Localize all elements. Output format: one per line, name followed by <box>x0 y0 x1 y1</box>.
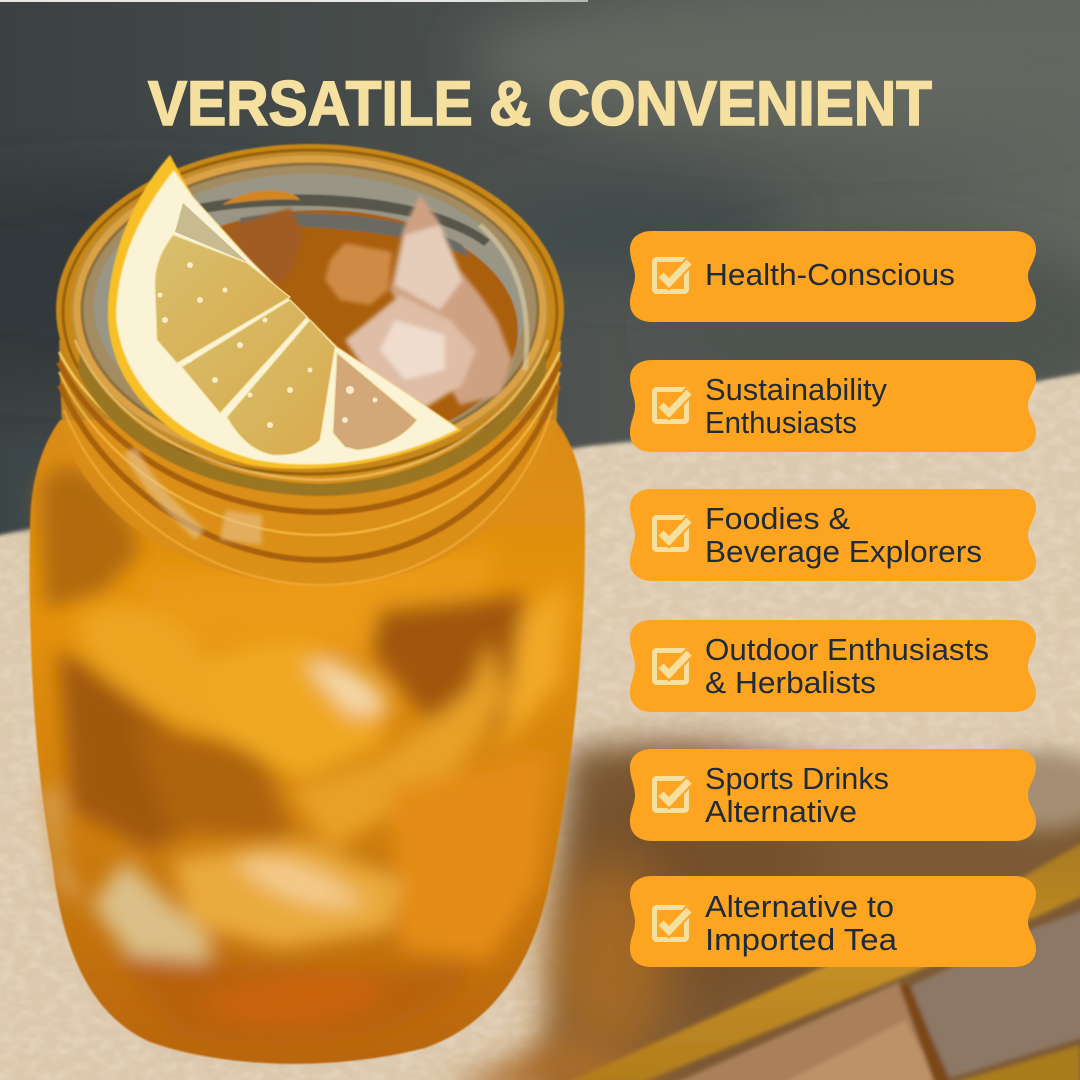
lemon wedge <box>108 155 462 469</box>
photo: mason jar of iced tea <box>30 144 585 1064</box>
lemon pulp highlights <box>158 262 378 428</box>
tag: Health-Conscious: Health-Conscious <box>705 257 955 292</box>
wooden board and sticks <box>568 841 1080 1080</box>
lemon segments <box>155 235 417 455</box>
title: VERSATILE & CONVENIENT <box>148 69 932 139</box>
tag: Health-Conscious <box>630 231 1036 322</box>
tag: Foodies & Beverage Explorers: Foodies & <box>705 501 850 536</box>
list panel: audience tags <box>630 231 1036 967</box>
ice cubes <box>224 195 512 408</box>
tag: Outdoor Enthusiasts & Herbalists: Outdoor Enthusiasts <box>705 632 989 667</box>
table shadow behind jar <box>540 745 1080 1080</box>
tag: Foodies & Beverage Explorers <box>630 489 1036 581</box>
jar rim and mouth <box>56 144 564 496</box>
tag: Sports Drinks Alternative: Sports Drinks <box>705 761 889 796</box>
tag: Alternative to Imported Tea: Alternative to <box>705 889 894 924</box>
tag: Sports Drinks Alternative: Alternative <box>705 794 857 829</box>
tag: Outdoor Enthusiasts & Herbalists <box>630 620 1036 712</box>
tag: Sports Drinks Alternative <box>630 749 1036 841</box>
tag: Sustainability Enthusiasts: Sustainability <box>705 372 887 407</box>
tag: Sustainability Enthusiasts <box>630 360 1036 452</box>
jar neck threads <box>59 340 561 585</box>
tag: Sustainability Enthusiasts: Enthusiasts <box>705 405 857 440</box>
tag: Alternative to Imported Tea <box>630 876 1036 967</box>
tag: Outdoor Enthusiasts & Herbalists: & Herbalists <box>705 665 876 700</box>
tag: Alternative to Imported Tea: Imported Tea <box>705 922 898 957</box>
tag: Foodies & Beverage Explorers: Beverage Explorers <box>705 534 982 569</box>
tea and ice inside jar <box>40 468 565 1044</box>
